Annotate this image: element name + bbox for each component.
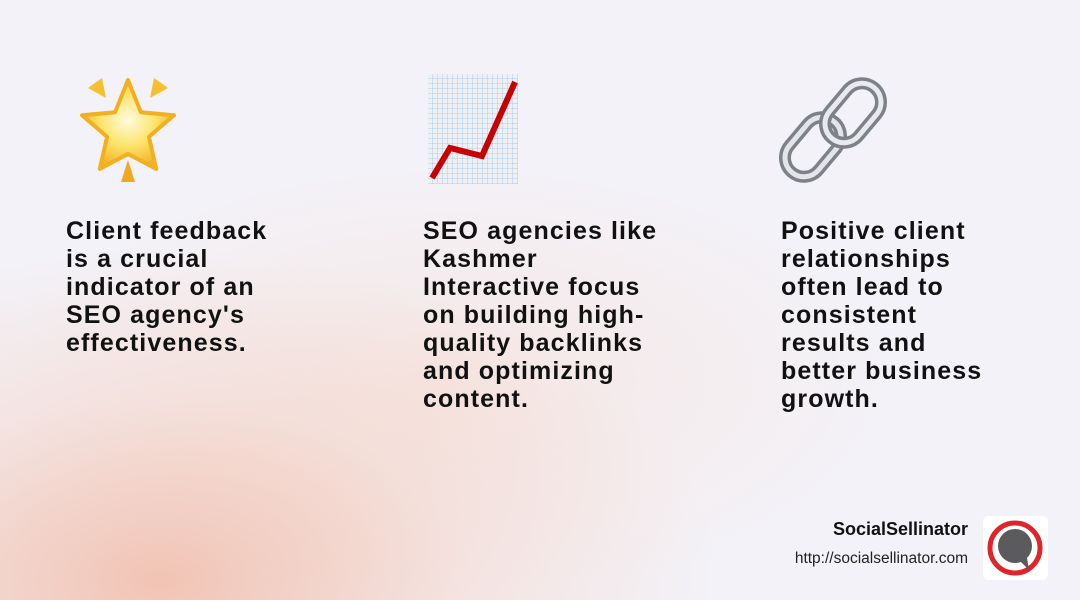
text: column 2: and optimizing (423, 357, 615, 385)
text: column 1 (66, 217, 267, 357)
text: column 2: Interactive focus (423, 273, 640, 301)
text: column 3: relationships (781, 245, 951, 273)
text: column 3: growth. (781, 385, 879, 413)
text: column 1: indicator of an (66, 273, 255, 301)
text: column 1: SEO agency's (66, 301, 245, 329)
text: column 2: content. (423, 385, 529, 413)
brand name: SocialSellinator (833, 519, 968, 539)
text: column 3: better business (781, 357, 982, 385)
text: column 2: Kashmer (423, 245, 538, 273)
icon: chart (428, 74, 518, 184)
text: column 2 (423, 217, 657, 413)
text: column 1: effectiveness. (66, 329, 247, 357)
text: column 3: results and (781, 329, 926, 357)
logo (983, 516, 1048, 580)
text: column 2: SEO agencies like (423, 217, 657, 245)
text: column 3: consistent (781, 301, 917, 329)
brand url: http://socialsellinator.com (795, 550, 968, 567)
text: column 3: often lead to (781, 273, 944, 301)
icon: chain link (779, 77, 887, 183)
icon: star (80, 78, 176, 182)
text: column 1: is a crucial (66, 245, 208, 273)
text: column 3: Positive client (781, 217, 966, 245)
text: column 1: Client feedback (66, 217, 267, 245)
text: column 3 (781, 217, 982, 413)
text: column 2: quality backlinks (423, 329, 643, 357)
text: column 2: on building high- (423, 301, 644, 329)
